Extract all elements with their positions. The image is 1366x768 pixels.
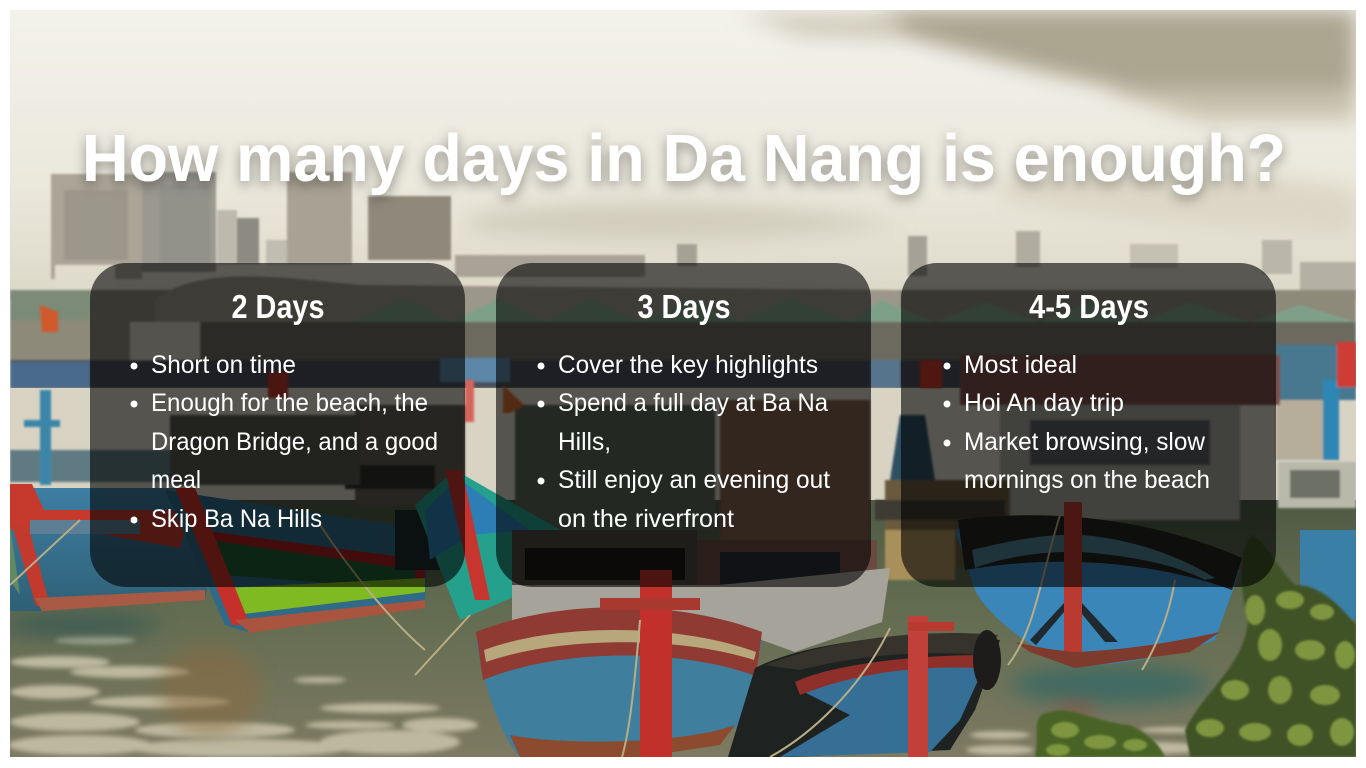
bullet list: 3 Days: on the riverfront [558, 505, 734, 533]
boat: far left blue hull [10, 484, 215, 611]
panel: 2 Days [90, 263, 465, 587]
background fleet [10, 305, 1356, 580]
cabin windows at centre [512, 530, 877, 586]
bullet list: 2 Days: Short on time [151, 351, 296, 379]
heading: 4-5 Days: 4-5 Days [1029, 288, 1149, 325]
bullet list: 2 Days: Enough for the beach, the [151, 389, 428, 417]
bullet list: 4-5 Days: mornings on the beach [964, 466, 1210, 494]
water reflections [8, 636, 1210, 757]
mangrove foliage [1035, 530, 1356, 757]
heading: 2 Days: 2 Days [232, 288, 324, 325]
boat: right blue hull [955, 502, 1242, 668]
sky [10, 10, 1356, 300]
bullet list: 3 Days: Hills, [558, 428, 611, 456]
shore and market [10, 276, 1356, 390]
mid water [10, 388, 1356, 500]
boat: dark hull beside centre [728, 616, 1001, 757]
bullet list: 3 Days: Still enjoy an evening out [558, 466, 830, 494]
clouds [470, 10, 1356, 241]
bullet list: 3 Days [538, 351, 830, 533]
boat: green and red hull [165, 488, 440, 633]
bullet list: 4-5 Days: Most ideal [964, 351, 1077, 379]
bullet list: 4-5 Days: Hoi An day trip [964, 389, 1124, 417]
bullet list: 3 Days: Cover the key highlights [558, 351, 818, 379]
panel: 3 Days [496, 263, 871, 587]
lower water [10, 500, 1356, 757]
bullet list: 2 Days [130, 351, 438, 533]
mooring ropes [10, 515, 1175, 757]
bullet list: 2 Days: meal [151, 466, 201, 494]
bullet list: 4-5 Days [944, 351, 1210, 494]
bullet list: 2 Days: Dragon Bridge, and a good [151, 428, 438, 456]
skyline [51, 172, 1356, 292]
title: How many days in Da Nang is enough? [82, 121, 1286, 196]
boat: centre foreground hull [476, 568, 890, 757]
bullet list: 3 Days: Spend a full day at Ba Na [558, 389, 828, 417]
bullet list: 4-5 Days: Market browsing, slow [964, 428, 1206, 456]
panel: 4-5 Days [901, 263, 1276, 587]
bullet list: 2 Days: Skip Ba Na Hills [151, 505, 322, 533]
heading: 3 Days: 3 Days [638, 288, 730, 325]
boat: teal hull at centre left [415, 470, 560, 620]
